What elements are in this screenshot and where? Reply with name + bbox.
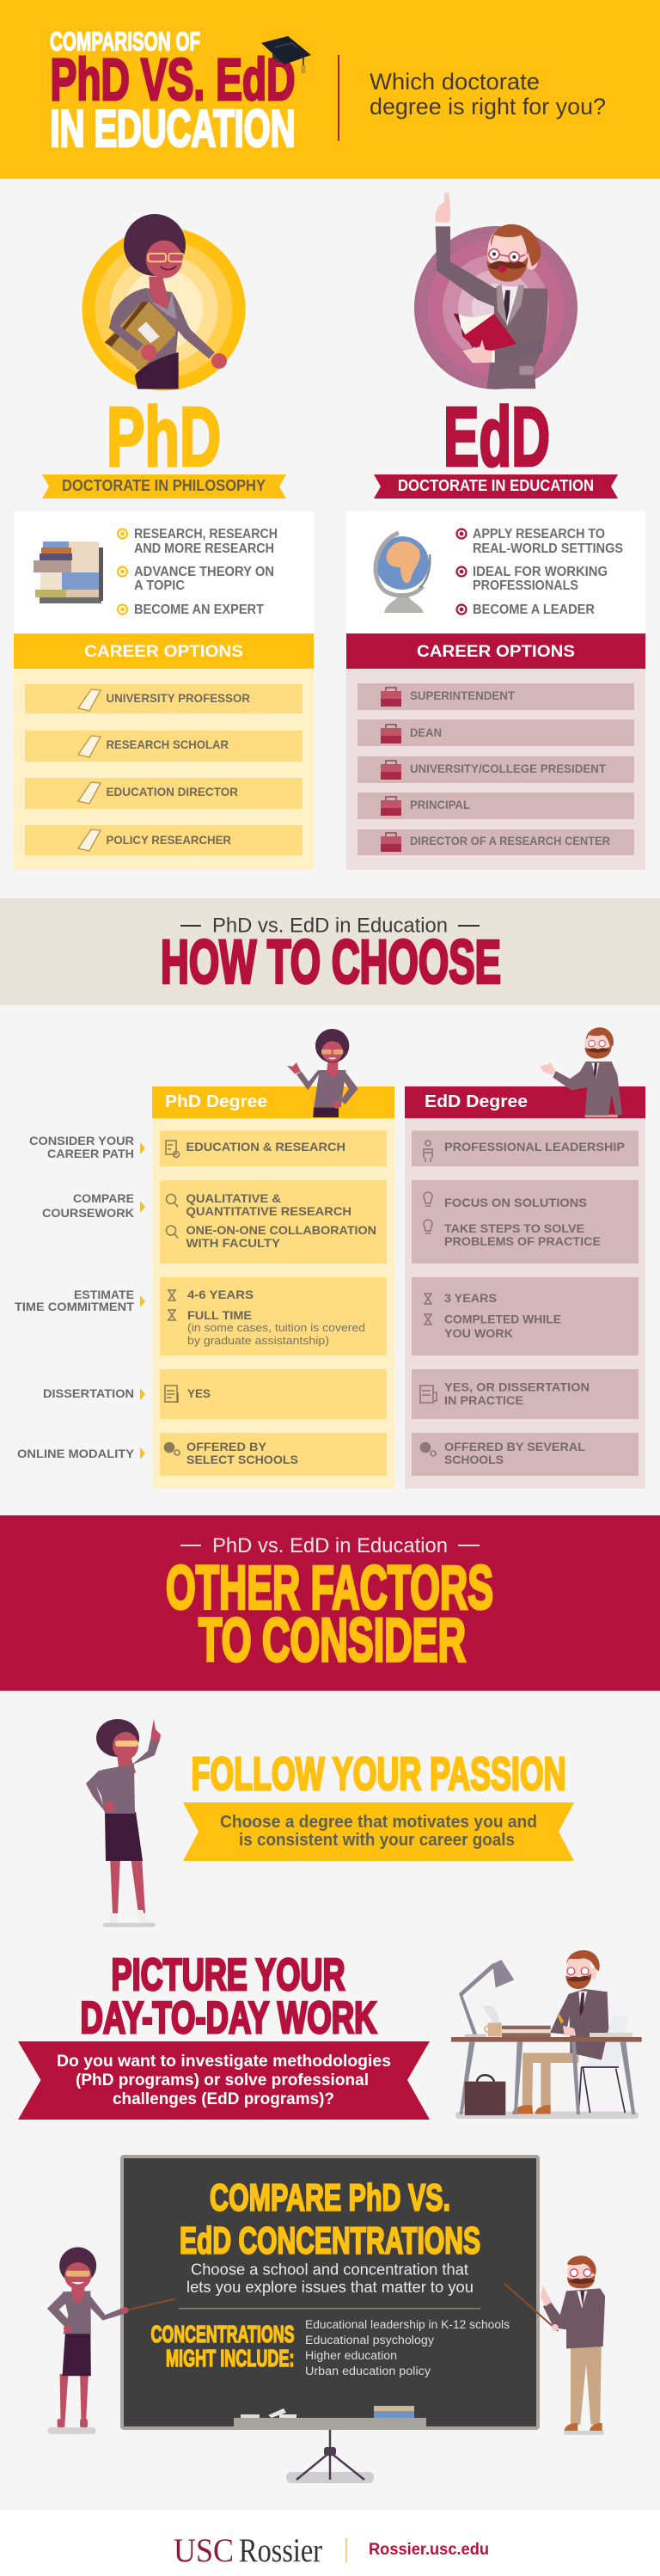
row labels: CAREER PATH [47,1147,134,1160]
panel: EdD summary [346,511,645,633]
icon: globe [376,533,430,613]
panel: EdD career options [346,633,645,870]
briefcase [465,2082,505,2115]
ribbon: picture your day-to-day work text: (PhD programs) or solve professional [76,2071,369,2090]
papers [590,2033,632,2037]
EdD bullet text: REAL-WORLD SETTINGS [473,542,623,556]
EdD career list: UNIVERSITY/COLLEGE PRESIDENT [410,762,606,775]
header question: degree is right for you? [370,94,606,119]
section heading: other factors to consider [0,1515,660,1691]
EdD row text: FOCUS ON SOLUTIONS [444,1196,587,1209]
PhD career list: POLICY RESEARCHER [107,833,231,847]
books [502,2026,551,2029]
ribbon: picture your day-to-day work text: Do you want to investigate methodologies [57,2053,391,2071]
torso [569,1989,608,2060]
comparison table column: EdD Degree: EdD Degree [425,1092,528,1111]
PhD row text: EDUCATION & RESEARCH [186,1140,345,1153]
PhD career list: EDUCATION DIRECTOR [107,785,238,798]
PhD row text [186,1140,376,1466]
PhD tuition note [187,1321,365,1347]
PhD career list: RESEARCH SCHOLAR [107,737,229,751]
row labels: COMPARE [73,1191,134,1205]
EdD bullet text: PROFESSIONALS [473,578,578,593]
icon: graduation cap [261,36,311,73]
heading: picture your day-to-day work: DAY-TO-DAY WORK [81,1993,377,2043]
row labels: DISSERTATION [43,1386,134,1400]
ribbon: follow your passion text: is consistent with your career goals [239,1831,515,1850]
PhD bullets [118,529,127,614]
EdD row text: IN PRACTICE [444,1393,523,1407]
comparison table column: PhD Degree: PhD Degree [165,1092,267,1111]
concentrations label: CONCENTRATIONS [151,2321,294,2347]
header banner [0,0,660,179]
concentrations list: Higher education [305,2349,397,2362]
desk [451,2037,642,2042]
EdD character in circle [414,193,578,389]
head [566,1952,591,1987]
PhD row text: YES [187,1386,211,1400]
header question: Which doctorate [370,69,540,95]
character: man presenting EdD column [540,1027,622,1117]
concentrations label: MIGHT INCLUDE: [166,2345,294,2371]
PhD career list: UNIVERSITY PROFESSOR [107,691,250,705]
panel: PhD career options: CAREER OPTIONS [84,643,243,661]
steam and mug [483,2005,501,2024]
row arrows [140,1142,145,1459]
row labels: ESTIMATE [74,1288,134,1301]
logo: USC Rossier [174,2532,322,2569]
concentrations list: Educational leadership in K-12 schools [305,2318,510,2331]
heading: picture your day-to-day work [81,1950,377,2043]
PhD row text: FULL TIME [187,1308,252,1322]
ribbon: picture your day-to-day work text: challenges (EdD programs)? [113,2090,334,2108]
PhD row text: ONE-ON-ONE COLLABORATION [186,1223,376,1237]
icons: briefcase [381,688,401,852]
concentrations label [151,2321,294,2371]
row labels: CONSIDER YOUR [29,1134,134,1147]
ribbon: picture your day-to-day work text [18,2041,430,2120]
EdD row icons [420,1141,437,1456]
PhD row text: QUALITATIVE & [186,1191,281,1205]
panel: PhD career options [14,633,314,870]
row labels: COURSEWORK [42,1206,134,1220]
icon: stack of books [34,542,103,603]
PhD career list [107,691,250,847]
lamp [459,1963,495,2034]
EdD bullet text [473,527,623,617]
panel: PhD summary [14,511,314,633]
blackboard subtitle: lets you explore issues that matter to you [186,2279,474,2296]
EdD heading: EdD [443,390,550,483]
EdD bullet text: APPLY RESEARCH TO [473,527,605,542]
row labels [15,1134,135,1460]
panel: EdD career options: CAREER OPTIONS [417,643,575,661]
icons: paper scroll [78,689,101,851]
PhD row text: WITH FACULTY [186,1236,281,1250]
logo: USC Rossier: USC [174,2532,234,2569]
legs [522,2053,578,2106]
ribbon: doctorate in philosophy: DOCTORATE IN PHILOSOPHY [62,477,266,494]
ribbon: doctorate in education: DOCTORATE IN EDUCATION [398,477,594,494]
blackboard subtitle [186,2261,474,2296]
row labels: TIME COMMITMENT [15,1300,134,1313]
concentrations list: Urban education policy [305,2365,431,2377]
blackboard [120,2155,540,2483]
character: woman teacher with pointer [47,2247,174,2434]
EdD bullet text: IDEAL FOR WORKING [473,565,608,579]
PhD bullet text [134,527,278,617]
PhD heading: PhD [107,390,221,483]
character: man teacher with pointer [504,2255,605,2435]
character: woman pointing up [86,1719,161,1927]
EdD row text: OFFERED BY SEVERAL [444,1440,585,1453]
blackboard heading: COMPARE PhD VS. [210,2176,450,2219]
concentrations list: Educational psychology [305,2334,434,2347]
EdD row text: TAKE STEPS TO SOLVE [444,1221,584,1235]
EdD career list: DEAN [410,725,442,739]
EdD row text: COMPLETED WHILE [444,1312,561,1325]
chair [582,2016,629,2069]
footer [0,2510,660,2576]
blackboard heading [180,2176,480,2262]
PhD bullet text: A TOPIC [134,578,185,593]
PhD bullet text: AND MORE RESEARCH [134,542,274,556]
EdD row text: YES, OR DISSERTATION [444,1380,590,1394]
EdD row text: PROBLEMS OF PRACTICE [444,1234,601,1248]
EdD row text [444,1140,625,1466]
footer: Rossier.usc.edu [369,2541,489,2559]
EdD bullets [457,529,466,614]
board stand [286,2430,374,2483]
character: man working at desk [451,1950,642,2119]
EdD career list: DIRECTOR OF A RESEARCH CENTER [410,834,610,847]
PhD tuition note: by graduate assistantship) [187,1334,329,1347]
logo: USC Rossier: Rossier [239,2532,322,2569]
section heading: other factors to consider: PhD vs. EdD in Education [212,1534,448,1557]
heading: picture your day-to-day work: PICTURE YOUR [112,1950,345,2000]
PhD bullet text: BECOME AN EXPERT [134,603,264,617]
row labels: ONLINE MODALITY [17,1447,135,1460]
header title: COMPARISON OF [50,26,200,57]
PhD bullet text: RESEARCH, RESEARCH [134,527,278,542]
EdD row text: YOU WORK [444,1326,513,1340]
header question [370,69,606,119]
PhD row text: 4-6 YEARS [187,1288,254,1301]
blackboard heading: EdD CONCENTRATIONS [180,2219,480,2262]
blackboard subtitle: Choose a school and concentration that [191,2261,468,2278]
ribbon: doctorate in education [374,474,618,499]
PhD bullet text: ADVANCE THEORY ON [134,565,274,579]
PhD tuition note: (in some cases, tuition is covered [187,1321,365,1334]
EdD row text: PROFESSIONAL LEADERSHIP [444,1140,625,1153]
comparison table column: EdD Degree [405,1086,645,1489]
chalk and erasers on tray [234,2406,426,2430]
EdD career list: PRINCIPAL [410,798,470,811]
ribbon: doctorate in philosophy [42,474,286,499]
header title [50,26,296,157]
header title: IN EDUCATION [50,100,296,157]
section heading: how to choose: PhD vs. EdD in Education [212,915,448,937]
ribbon: follow your passion text: Choose a degree that motivates you and [220,1813,537,1832]
comparison table column: PhD Degree [152,1086,394,1489]
PhD character in circle [82,214,246,390]
PhD row text: OFFERED BY [186,1440,267,1453]
EdD row text: SCHOOLS [444,1453,504,1466]
concentrations list [305,2318,510,2377]
PhD row text: SELECT SCHOOLS [186,1453,298,1466]
EdD bullet text: BECOME A LEADER [473,603,595,617]
EdD row text: 3 YEARS [444,1291,497,1305]
header title: PhD VS. EdD [50,46,296,113]
character: woman presenting PhD column [287,1029,358,1117]
PhD row icons [165,1141,180,1455]
PhD row text: QUANTITATIVE RESEARCH [186,1204,351,1218]
ribbon: follow your passion text [183,1802,574,1861]
EdD career list: SUPERINTENDENT [410,688,515,702]
EdD career list [410,688,610,847]
section heading: how to choose [0,898,660,1006]
section heading: other factors to consider: TO CONSIDER [199,1607,466,1674]
